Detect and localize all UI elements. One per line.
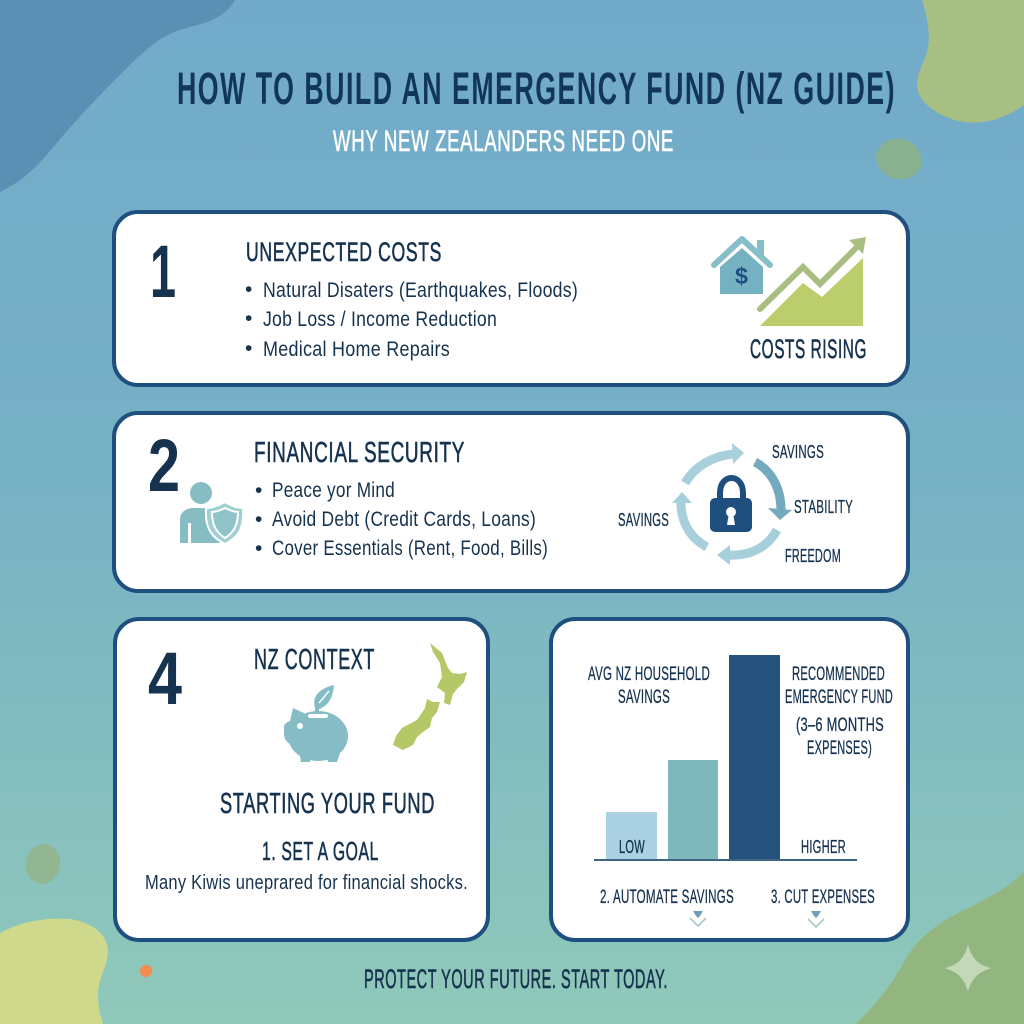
bar chart: [594, 655, 857, 860]
icon: piggy bank: [284, 685, 348, 762]
bullet list: security: Avoid Debt (Credit Cards, Loans): [272, 508, 536, 531]
label: higher: HIGHER: [801, 837, 846, 857]
icon: house with dollar: $: [735, 263, 748, 289]
bullet list: security: •: [255, 479, 262, 502]
icon: chevron left: [690, 911, 706, 926]
label: recommended emergency fund: EXPENSES): [807, 738, 872, 759]
number 1: 1: [150, 230, 176, 313]
bullet list: costs: Natural Disaters (Earthquakes, Floods): [263, 279, 578, 302]
label: recommended emergency fund: [785, 664, 893, 759]
bullet list: security: Peace yor Mind: [272, 479, 395, 502]
panel: financial security: [114, 413, 908, 591]
text: automate savings: 2. AUTOMATE SAVINGS: [600, 887, 734, 908]
dot: orange: [140, 965, 152, 977]
blob: small green top right: [872, 134, 926, 184]
label: recommended emergency fund: RECOMMENDED: [792, 664, 885, 685]
label: avg nz household savings: [588, 664, 710, 708]
bullet list: costs: [245, 278, 578, 361]
bullet list: costs: Job Loss / Income Reduction: [263, 308, 497, 331]
label: recommended emergency fund: (3–6 MONTHS: [796, 715, 884, 736]
text: cut expenses: 3. CUT EXPENSES: [771, 887, 875, 908]
label: stability: STABILITY: [794, 497, 853, 517]
bullet list: costs: •: [245, 278, 252, 301]
heading: starting your fund: STARTING YOUR FUND: [220, 788, 435, 820]
heading: financial security: FINANCIAL SECURITY: [254, 437, 465, 469]
text: set a goal: 1. SET A GOAL: [262, 836, 379, 866]
label: savings left: SAVINGS: [618, 510, 669, 530]
bullet list: costs: •: [245, 337, 252, 360]
blob: bottom right: [856, 872, 1024, 1024]
icon: chevron right: [808, 911, 824, 927]
bullet list: security: •: [255, 537, 262, 560]
panel: unexpected costs: [114, 212, 908, 385]
panel: nz context: [115, 619, 488, 940]
icon: lock with cycle arrows: [672, 443, 792, 565]
icon: rising costs chart: [760, 237, 866, 326]
blob: top right: [917, 0, 1024, 123]
icon: map of new zealand: [393, 643, 467, 750]
bullet list: security: [255, 479, 548, 560]
label: low: LOW: [619, 837, 645, 857]
number 4: 4: [148, 637, 182, 720]
subtitle: WHY NEW ZEALANDERS NEED ONE: [333, 125, 674, 158]
label: avg nz household savings: SAVINGS: [618, 687, 670, 708]
blob: bottom left: [0, 919, 108, 1024]
panel: savings chart: [551, 619, 908, 940]
text: many kiwis: Many Kiwis uneprared for financial shocks.: [145, 872, 468, 894]
icon: house with dollar: [714, 239, 770, 294]
heading: unexpected costs: UNEXPECTED COSTS: [246, 237, 442, 267]
icon: sparkle: [944, 944, 992, 992]
blob: small green left: [23, 841, 63, 887]
bullet list: security: Cover Essentials (Rent, Food, Bills): [272, 537, 548, 560]
bullet list: security: •: [255, 508, 262, 531]
label: avg nz household savings: AVG NZ HOUSEHOLD: [588, 664, 710, 685]
label: costs rising: COSTS RISING: [750, 334, 867, 364]
label: recommended emergency fund: EMERGENCY FUND: [785, 687, 893, 708]
blob: top left: [0, 0, 235, 192]
label: savings top: SAVINGS: [772, 442, 824, 462]
bullet list: costs: •: [245, 307, 252, 330]
icon: person with shield: [180, 482, 243, 544]
footer tagline: PROTECT YOUR FUTURE. START TODAY.: [364, 964, 668, 994]
bullet list: costs: Medical Home Repairs: [263, 338, 450, 361]
label: freedom: FREEDOM: [785, 546, 841, 566]
number 2: 2: [148, 424, 180, 507]
heading: nz context: NZ CONTEXT: [254, 644, 375, 676]
